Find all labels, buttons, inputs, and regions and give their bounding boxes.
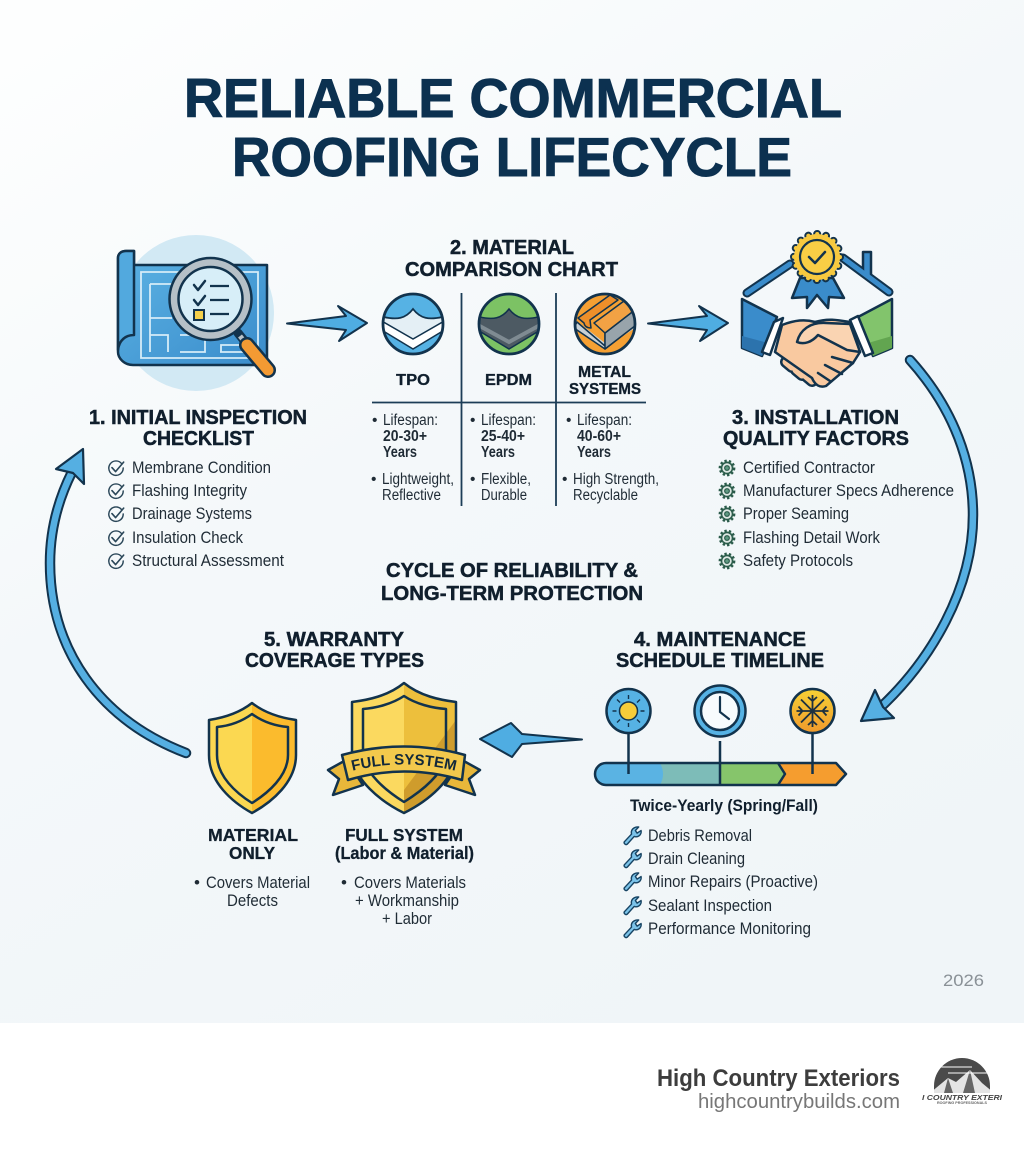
column headers: EPDM — [485, 372, 532, 389]
icon: snowflake — [790, 689, 834, 733]
center caption — [381, 560, 643, 605]
arrow: step 2 to 3 — [648, 306, 728, 341]
heading: step 5: 5. WARRANTY — [264, 629, 405, 651]
icon: sun — [606, 689, 650, 733]
label: full system — [335, 825, 474, 863]
title — [184, 67, 842, 188]
arrow: step 1 to 2 — [287, 306, 367, 341]
heading: step 4: SCHEDULE TIMELINE — [616, 650, 824, 672]
heading: step 5 — [245, 629, 424, 672]
footer brand name: High Country Exteriors — [657, 1065, 900, 1092]
text: material only coverage: Defects — [227, 891, 278, 910]
heading: step 4: 4. MAINTENANCE — [634, 629, 806, 651]
heading: step 3: QUALITY FACTORS — [723, 428, 909, 450]
column: TPO details: • — [372, 412, 377, 429]
column: EPDM details: Durable — [481, 487, 527, 504]
icon: metal systems — [574, 294, 640, 354]
text: full system coverage: Covers Materials — [354, 873, 466, 892]
column: TPO details: • — [371, 471, 376, 488]
year label: 2026 — [943, 971, 984, 990]
center caption: LONG-TERM PROTECTION — [381, 583, 643, 605]
text: full system coverage: + Workmanship — [355, 891, 459, 910]
maintenance list: Sealant Inspection — [648, 896, 772, 915]
label: material only: ONLY — [229, 843, 275, 863]
quality factors list: Certified Contractor — [743, 458, 875, 477]
column: metal details: 40-60+ — [577, 428, 621, 445]
quality factors list: Proper Seaming — [743, 504, 849, 523]
column: metal details: Recyclable — [573, 487, 638, 504]
title: ROOFING LIFECYCLE — [232, 126, 792, 188]
checklist: Membrane Condition — [132, 458, 271, 477]
footer — [658, 1058, 1002, 1112]
center caption: CYCLE OF RELIABILITY & — [386, 560, 638, 582]
logo: I COUNTRY EXTERI — [922, 1093, 1003, 1102]
text: full system coverage: + Labor — [382, 909, 432, 928]
footer url: highcountrybuilds.com — [698, 1091, 900, 1113]
quality factors list: Manufacturer Specs Adherence — [743, 481, 954, 500]
maintenance list: Debris Removal — [648, 826, 752, 845]
checklist — [109, 458, 284, 570]
label: material only — [208, 825, 298, 863]
icon: clock — [694, 686, 746, 736]
icon: blueprint with magnifying glass — [118, 235, 274, 391]
column headers: METAL — [578, 364, 631, 381]
label: full system: FULL SYSTEM — [345, 825, 463, 845]
arrow: step 4 to 5 — [480, 723, 582, 757]
text: material only coverage: • — [194, 873, 200, 892]
column headers: TPO — [396, 372, 430, 389]
column: TPO details: 20-30+ — [383, 428, 427, 445]
icon: full system shield — [326, 682, 482, 814]
label: full system: (Labor & Material) — [335, 843, 474, 863]
heading: step 1 — [89, 407, 307, 450]
arrow: step 5 to 1 curved — [50, 449, 186, 753]
panel: step 2 material comparison — [371, 237, 659, 506]
column: metal details: • — [566, 412, 571, 429]
quality factors list: Safety Protocols — [743, 551, 853, 570]
column: EPDM details: • — [470, 471, 475, 488]
icon: handshake with badge — [742, 234, 892, 387]
label: material only: MATERIAL — [208, 825, 298, 845]
text: full system coverage — [341, 873, 466, 928]
quality factors list — [720, 458, 954, 570]
column: EPDM details: Years — [481, 444, 515, 461]
column: EPDM details: • — [470, 412, 475, 429]
column: TPO details: Lifespan: — [383, 412, 438, 429]
text: full system coverage: • — [341, 873, 347, 892]
heading: step 4 — [616, 629, 824, 672]
column headers: SYSTEMS — [569, 381, 641, 398]
heading: step 2 — [405, 237, 618, 281]
quality factors list: Flashing Detail Work — [743, 528, 880, 547]
checklist: Insulation Check — [132, 528, 243, 547]
column: EPDM details: 25-40+ — [481, 428, 525, 445]
column: TPO details — [371, 412, 454, 504]
column: TPO details: Years — [383, 444, 417, 461]
checklist: Drainage Systems — [132, 504, 252, 523]
panel: step 3 installation quality — [720, 234, 954, 570]
icon: EPDM — [476, 294, 542, 354]
logo — [922, 1058, 1003, 1105]
heading: step 3 — [723, 407, 909, 450]
heading: step 1: CHECKLIST — [143, 428, 254, 450]
checklist: Flashing Integrity — [132, 481, 247, 500]
heading: step 3: 3. INSTALLATION — [732, 407, 899, 429]
maintenance list: Performance Monitoring — [648, 919, 811, 938]
maintenance list: Drain Cleaning — [648, 849, 745, 868]
column: metal details — [562, 412, 659, 504]
arrow: step 3 to 4 curved — [861, 360, 973, 721]
heading: step 2: 2. MATERIAL — [450, 237, 574, 259]
column: metal details: Lifespan: — [577, 412, 632, 429]
heading: step 1: 1. INITIAL INSPECTION — [89, 407, 307, 429]
column: metal details: • — [562, 471, 567, 488]
logo: ROOFING PROFESSIONALS — [937, 1101, 988, 1105]
column headers — [396, 364, 641, 398]
icon: material shield — [209, 703, 296, 813]
column: EPDM details — [470, 412, 536, 504]
title: RELIABLE COMMERCIAL — [184, 67, 842, 129]
checklist: Structural Assessment — [132, 551, 284, 570]
timeline bar — [595, 733, 846, 785]
panel: step 4 maintenance schedule — [595, 629, 846, 938]
column: metal details: Years — [577, 444, 611, 461]
column: metal details: High Strength, — [573, 471, 659, 488]
panel: step 1 initial inspection — [89, 235, 307, 570]
heading: step 2: COMPARISON CHART — [405, 259, 618, 281]
icon: TPO — [380, 294, 446, 354]
text: material only coverage: Covers Material — [206, 873, 310, 892]
panel: step 5 warranty coverage — [194, 629, 482, 928]
icon: full system shield: FULL SYSTEM — [351, 754, 457, 770]
maintenance list: Minor Repairs (Proactive) — [648, 872, 818, 891]
column: TPO details: Lightweight, — [382, 471, 454, 488]
column: EPDM details: Flexible, — [481, 471, 531, 488]
column: EPDM details: Lifespan: — [481, 412, 536, 429]
heading: step 5: COVERAGE TYPES — [245, 650, 424, 672]
column: TPO details: Reflective — [382, 487, 441, 504]
maintenance list — [624, 826, 818, 938]
text: material only coverage — [194, 873, 310, 910]
timeline caption: Twice-Yearly (Spring/Fall) — [630, 796, 818, 815]
